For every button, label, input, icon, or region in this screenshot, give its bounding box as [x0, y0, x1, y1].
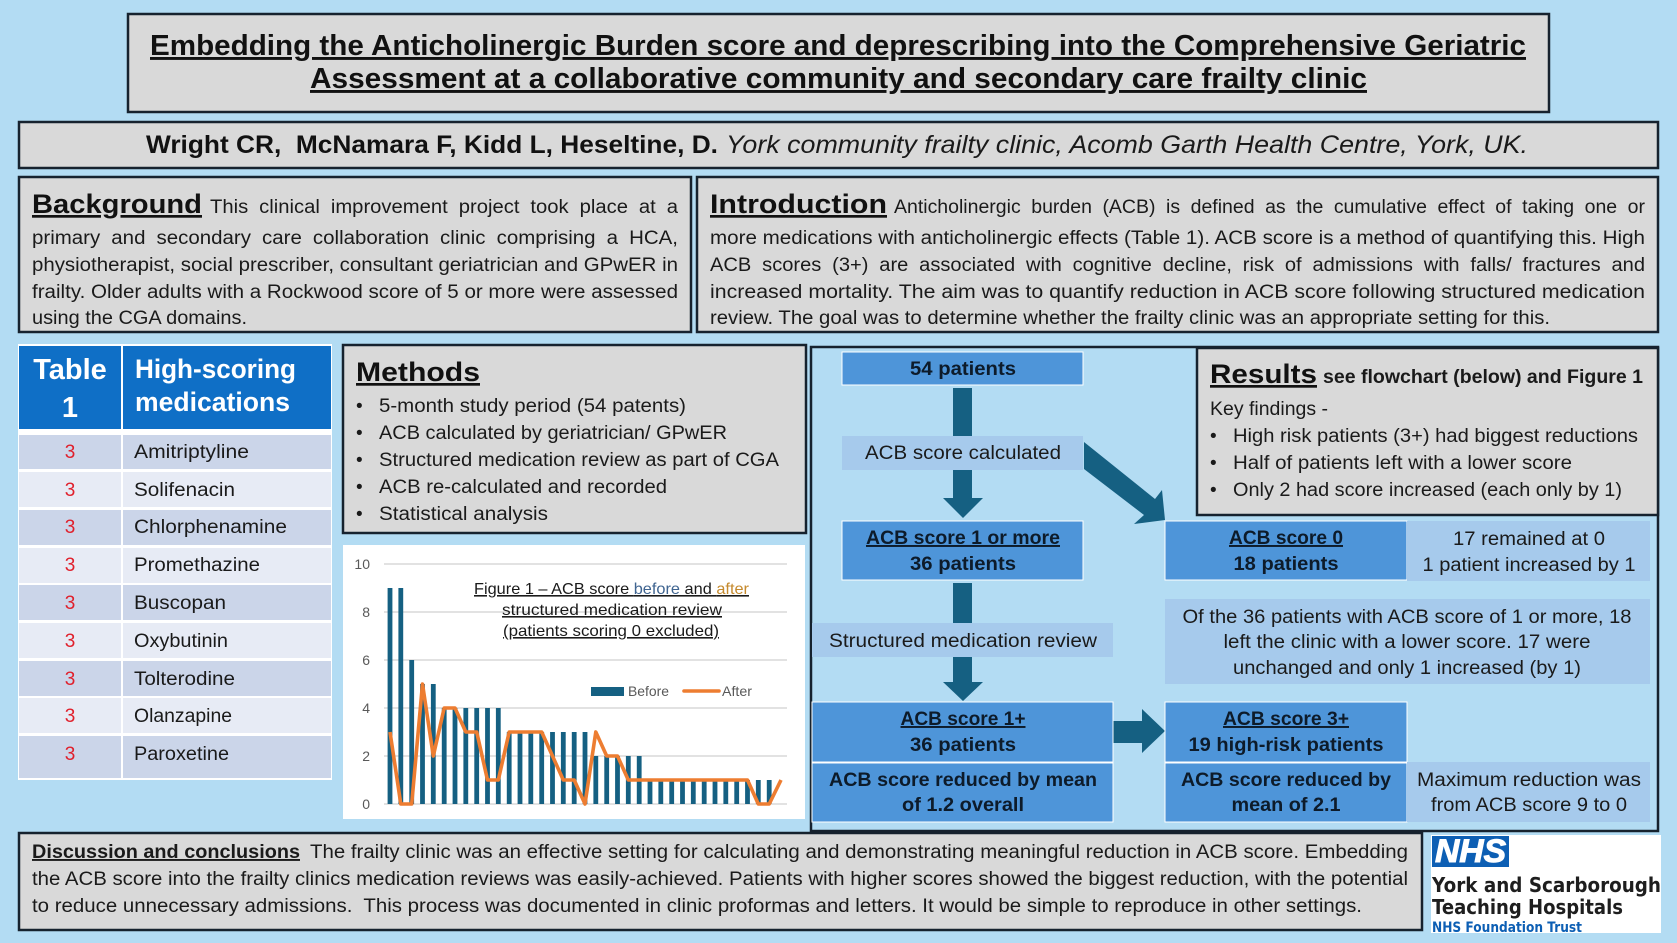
- title: Embedding the Anticholinergic Burden score and deprescribing into the Comprehensive Geriatric: [150, 30, 1526, 62]
- panel: results: Results: [1210, 359, 1317, 389]
- panel: methods: •: [356, 450, 363, 471]
- table rows: Chlorphenamine: [134, 517, 287, 538]
- table rows: Olanzapine: [134, 706, 232, 727]
- box: ACB score 3+: ACB score 3+: [1223, 708, 1349, 730]
- panel: methods: •: [356, 477, 363, 498]
- box: ACB score 1 or more: ACB score 1 or more: [866, 527, 1060, 549]
- table rows: 3: [65, 706, 75, 727]
- chart axis labels: 10: [354, 556, 370, 572]
- box: 54 patients: 54 patients: [910, 358, 1016, 380]
- authors: Wright CR, McNamara F, Kidd L, Heseltine, D.: [146, 131, 718, 159]
- chart legend: Before: [628, 683, 669, 699]
- box: 54 patients: [842, 352, 1083, 385]
- box: ACB score 0: ACB score 0: [1229, 527, 1343, 549]
- panel: methods: ACB calculated by geriatrician/ GPwER: [379, 423, 727, 444]
- bars: before: [388, 588, 772, 804]
- panel: flowchart and results: [811, 347, 1658, 831]
- box: 17 remained at 0: 17 remained at 0: [1453, 529, 1605, 550]
- panel: discussion and conclusions: The frailty clinic was an effective setting for calculating and demonstrating meaningful reduction in ACB score. Embedding: [310, 842, 1408, 863]
- panel: introduction: Anticholinergic burden (ACB) is defined as the cumulative effect of taking one or: [894, 197, 1646, 218]
- chart title: structured medication review: [502, 602, 722, 619]
- panel: methods: 5-month study period (54 patents): [379, 396, 686, 417]
- table header: [19, 346, 331, 429]
- table rows: Amitriptyline: [134, 442, 249, 463]
- logo: NHS York and Scarborough: NHS: [1435, 833, 1507, 869]
- logo: NHS York and Scarborough: Teaching Hospitals: [1432, 895, 1623, 919]
- box: 17 remained at 0: 1 patient increased by 1: [1422, 555, 1636, 576]
- table rows: 3: [65, 593, 75, 614]
- box: reduced by mean 2.1: [1165, 763, 1407, 822]
- table 1: high-scoring medications: [18, 344, 332, 780]
- panel: background: [19, 177, 691, 332]
- chart axis labels: 2: [362, 748, 370, 764]
- box: of the 36 patients: [1165, 599, 1650, 684]
- table header: 1: [62, 392, 78, 424]
- logo: NHS York and Scarborough: York and Scarborough: [1431, 873, 1661, 897]
- figure 1: bar and line chart: [343, 545, 805, 819]
- box: ACB score 1+: 36 patients: [910, 734, 1016, 756]
- box: ACB score 0: [1165, 521, 1407, 580]
- box: ACB score calculated: [842, 436, 1083, 470]
- logo: NHS York and Scarborough: [1431, 833, 1661, 936]
- panel: background: frailty. Older adults with a Rockwood score of 5 or more were assessed: [32, 282, 678, 303]
- table rows: Oxybutinin: [134, 631, 228, 652]
- panel: introduction: Introduction: [710, 189, 887, 219]
- box: ACB score 0: 18 patients: [1234, 553, 1339, 575]
- panel: background: Background: [32, 189, 202, 219]
- arrow: calculated to ACB 1 or more: [943, 470, 983, 518]
- arrow: ACB 1 or more to review: [953, 583, 972, 623]
- panel: results: see flowchart (below) and Figure 1: [1323, 367, 1643, 388]
- box: ACB score 1+: [812, 702, 1113, 762]
- table header: Table: [33, 354, 107, 386]
- panel: discussion and conclusions: Discussion and conclusions: [32, 842, 300, 863]
- box: reduced by mean 1.2: [812, 763, 1113, 822]
- title: Assessment at a collaborative community and secondary care frailty clinic: [310, 63, 1367, 95]
- chart axis labels: 8: [362, 604, 370, 620]
- panel: discussion and conclusions: [19, 833, 1422, 930]
- table rows: Solifenacin: [134, 480, 235, 501]
- arrow: ACB 1+ to ACB 3+: [1113, 709, 1165, 753]
- panel: results: Half of patients left with a lower score: [1233, 453, 1572, 474]
- table rows: 3: [65, 669, 75, 690]
- chart axis labels: 0: [362, 796, 370, 812]
- box: ACB score 1+: ACB score 1+: [900, 708, 1026, 730]
- panel: introduction: increased mortality. The aim was to quantify reduction in ACB score following structured medication: [710, 282, 1645, 303]
- arrow: review to ACB 1+: [943, 657, 983, 701]
- table rows: 3: [65, 631, 75, 652]
- chart axis labels: [354, 556, 370, 812]
- panel: background: This clinical improvement project took place at a: [210, 197, 678, 218]
- box: structured medication review: [812, 623, 1113, 657]
- title: [128, 14, 1549, 112]
- chart legend: After: [722, 683, 752, 699]
- panel: results: [1197, 348, 1658, 515]
- table rows: Paroxetine: [134, 744, 229, 765]
- panel: background: using the CGA domains.: [32, 308, 247, 329]
- table rows: Buscopan: [134, 593, 226, 614]
- panel: methods: Statistical analysis: [379, 504, 548, 525]
- box: 17 remained at 0: [1407, 521, 1650, 581]
- box: maximum reduction: from ACB score 9 to 0: [1431, 795, 1627, 816]
- logo: NHS York and Scarborough: NHS Foundation Trust: [1432, 920, 1582, 936]
- panel: introduction: review. The goal was to determine whether the frailty clinic was an appropriate setting for this.: [710, 308, 1550, 329]
- box: reduced by mean 2.1: mean of 2.1: [1232, 794, 1341, 816]
- panel: results: •: [1210, 426, 1217, 447]
- table rows: 3: [65, 480, 75, 501]
- panel: methods: [343, 345, 806, 533]
- chart title: Figure 1 – ACB score before and after: [474, 581, 750, 598]
- box: reduced by mean 2.1: ACB score reduced by: [1181, 769, 1391, 791]
- box: ACB score 1 or more: 36 patients: [910, 553, 1016, 575]
- panel: methods: •: [356, 423, 363, 444]
- panel: methods: ACB re-calculated and recorded: [379, 477, 667, 498]
- box: of the 36 patients: left the clinic with a lower score. 17 were: [1224, 632, 1590, 653]
- panel: background: physiotherapist, social prescriber, consultant geriatrician and GPwER in: [32, 255, 678, 276]
- chart legend: [591, 683, 752, 699]
- chart title: (patients scoring 0 excluded): [503, 623, 719, 640]
- box: ACB score calculated: ACB score calculated: [865, 443, 1061, 464]
- box: reduced by mean 1.2: ACB score reduced by mean: [829, 769, 1097, 791]
- panel: discussion and conclusions: to reduce unnecessary admissions. This process was documented in clinic proformas and letters. It would be simple to reproduce in other settings.: [32, 896, 1362, 917]
- box: structured medication review: Structured medication review: [829, 631, 1097, 652]
- panel: discussion and conclusions: the ACB score into the frailty clinics medication reviews was easily-achieved. Patients with higher scores showed the biggest reduction, with the potential: [32, 869, 1408, 890]
- panel: results: Only 2 had score increased (each only by 1): [1233, 480, 1622, 501]
- authors: [19, 122, 1658, 168]
- panel: results: •: [1210, 480, 1217, 501]
- box: ACB score 1 or more: [842, 521, 1083, 580]
- authors: York community frailty clinic, Acomb Garth Health Centre, York, UK.: [726, 131, 1528, 159]
- chart axis labels: 4: [362, 700, 370, 716]
- panel: methods: Structured medication review as part of CGA: [379, 450, 779, 471]
- panel: introduction: ACB scores (3+) are associated with cognitive decline, risk of admissions with falls/ fractures and: [710, 255, 1645, 276]
- chart axis labels: 6: [362, 652, 370, 668]
- box: maximum reduction: [1407, 762, 1650, 822]
- table rows: 3: [65, 442, 75, 463]
- table rows: Promethazine: [134, 555, 260, 576]
- panel: results: •: [1210, 453, 1217, 474]
- box: ACB score 3+: 19 high-risk patients: [1188, 734, 1384, 756]
- panel: background: primary and secondary care collaboration clinic comprising a HCA,: [32, 228, 678, 249]
- panel: results: Key findings -: [1210, 399, 1328, 420]
- table rows: 3: [65, 744, 75, 765]
- line: after: [390, 684, 781, 804]
- panel: results: High risk patients (3+) had biggest reductions: [1233, 426, 1638, 447]
- table header: medications: [135, 387, 290, 417]
- table rows: Tolterodine: [134, 669, 235, 690]
- box: of the 36 patients: Of the 36 patients with ACB score of 1 or more, 18: [1182, 607, 1632, 628]
- box: maximum reduction: Maximum reduction was: [1417, 770, 1641, 791]
- arrow: calculated to ACB 0: [1084, 442, 1165, 524]
- panel: introduction: [697, 177, 1658, 332]
- chart title: [474, 581, 750, 640]
- table rows: [19, 435, 331, 778]
- table rows: 3: [65, 517, 75, 538]
- box: reduced by mean 1.2: of 1.2 overall: [902, 794, 1024, 816]
- box: of the 36 patients: unchanged and only 1 increased (by 1): [1233, 658, 1581, 679]
- arrow: 54 patients to ACB calculated: [953, 388, 972, 436]
- panel: methods: •: [356, 396, 363, 417]
- box: ACB score 3+: [1165, 702, 1407, 762]
- panel: methods: Methods: [356, 357, 480, 387]
- panel: introduction: more medications with anticholinergic effects (Table 1). ACB score is a method of quantifying this. High: [710, 228, 1645, 249]
- panel: methods: •: [356, 504, 363, 525]
- table header: High-scoring: [135, 354, 296, 384]
- table rows: 3: [65, 555, 75, 576]
